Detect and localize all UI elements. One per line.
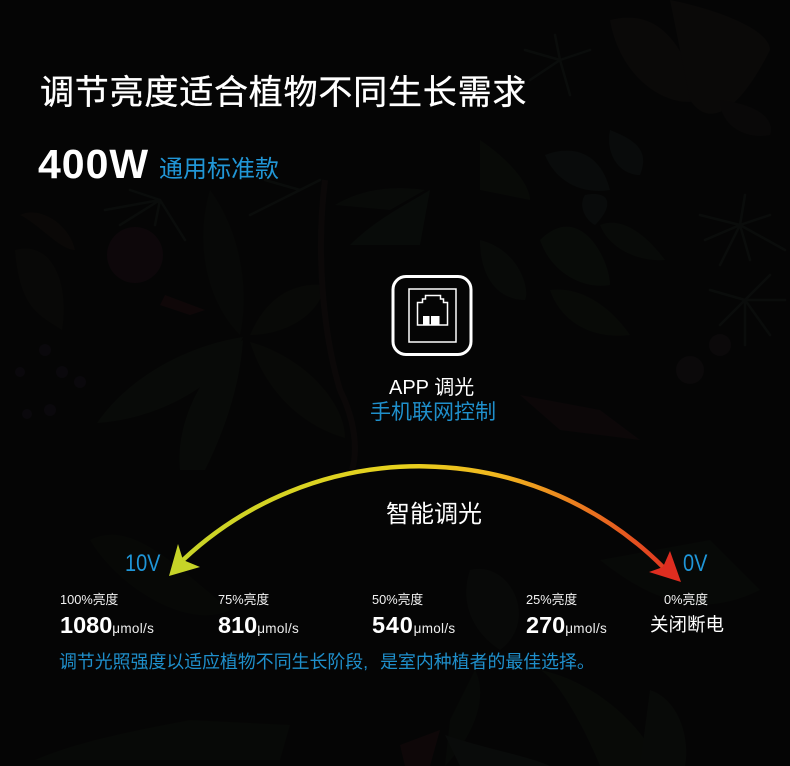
level: 0% (650, 592, 724, 635)
level: 0%: 0%亮度 (664, 592, 708, 607)
level: 50%: 50%亮度 (372, 592, 423, 607)
level: 100% (60, 592, 154, 638)
level: 25%: 270μmol/s (526, 612, 607, 638)
level: 50% (372, 592, 455, 638)
level: 25% (526, 592, 607, 638)
label: phone network control: 手机联网控制 (370, 401, 496, 424)
level: 75%: 810μmol/s (218, 612, 299, 638)
wattage: 400W (38, 141, 149, 187)
model subtitle: 通用标准款 (159, 156, 279, 183)
level: 50%: 540μmol/s (372, 612, 455, 638)
level: 100%: 100%亮度 (60, 592, 118, 607)
label: smart dimming: 智能调光 (386, 501, 482, 528)
level: 75% (218, 592, 299, 638)
label: APP dimming: APP 调光 (389, 377, 474, 399)
title: 调节亮度适合植物不同生长需求 (40, 74, 527, 112)
level: 100%: 1080μmol/s (60, 612, 154, 638)
level: 75%: 75%亮度 (218, 592, 269, 607)
heading: 400W standard model (38, 141, 279, 187)
description: 调节光照强度以适应植物不同生长阶段, 是室内种植者的最佳选择。 (59, 652, 595, 672)
label: 10V: 10V (125, 550, 160, 577)
level: 25%: 25%亮度 (526, 592, 577, 607)
level: 0%: 关闭断电 (650, 614, 724, 635)
icon: network jack (392, 275, 472, 356)
label: 0V: 0V (683, 550, 707, 577)
